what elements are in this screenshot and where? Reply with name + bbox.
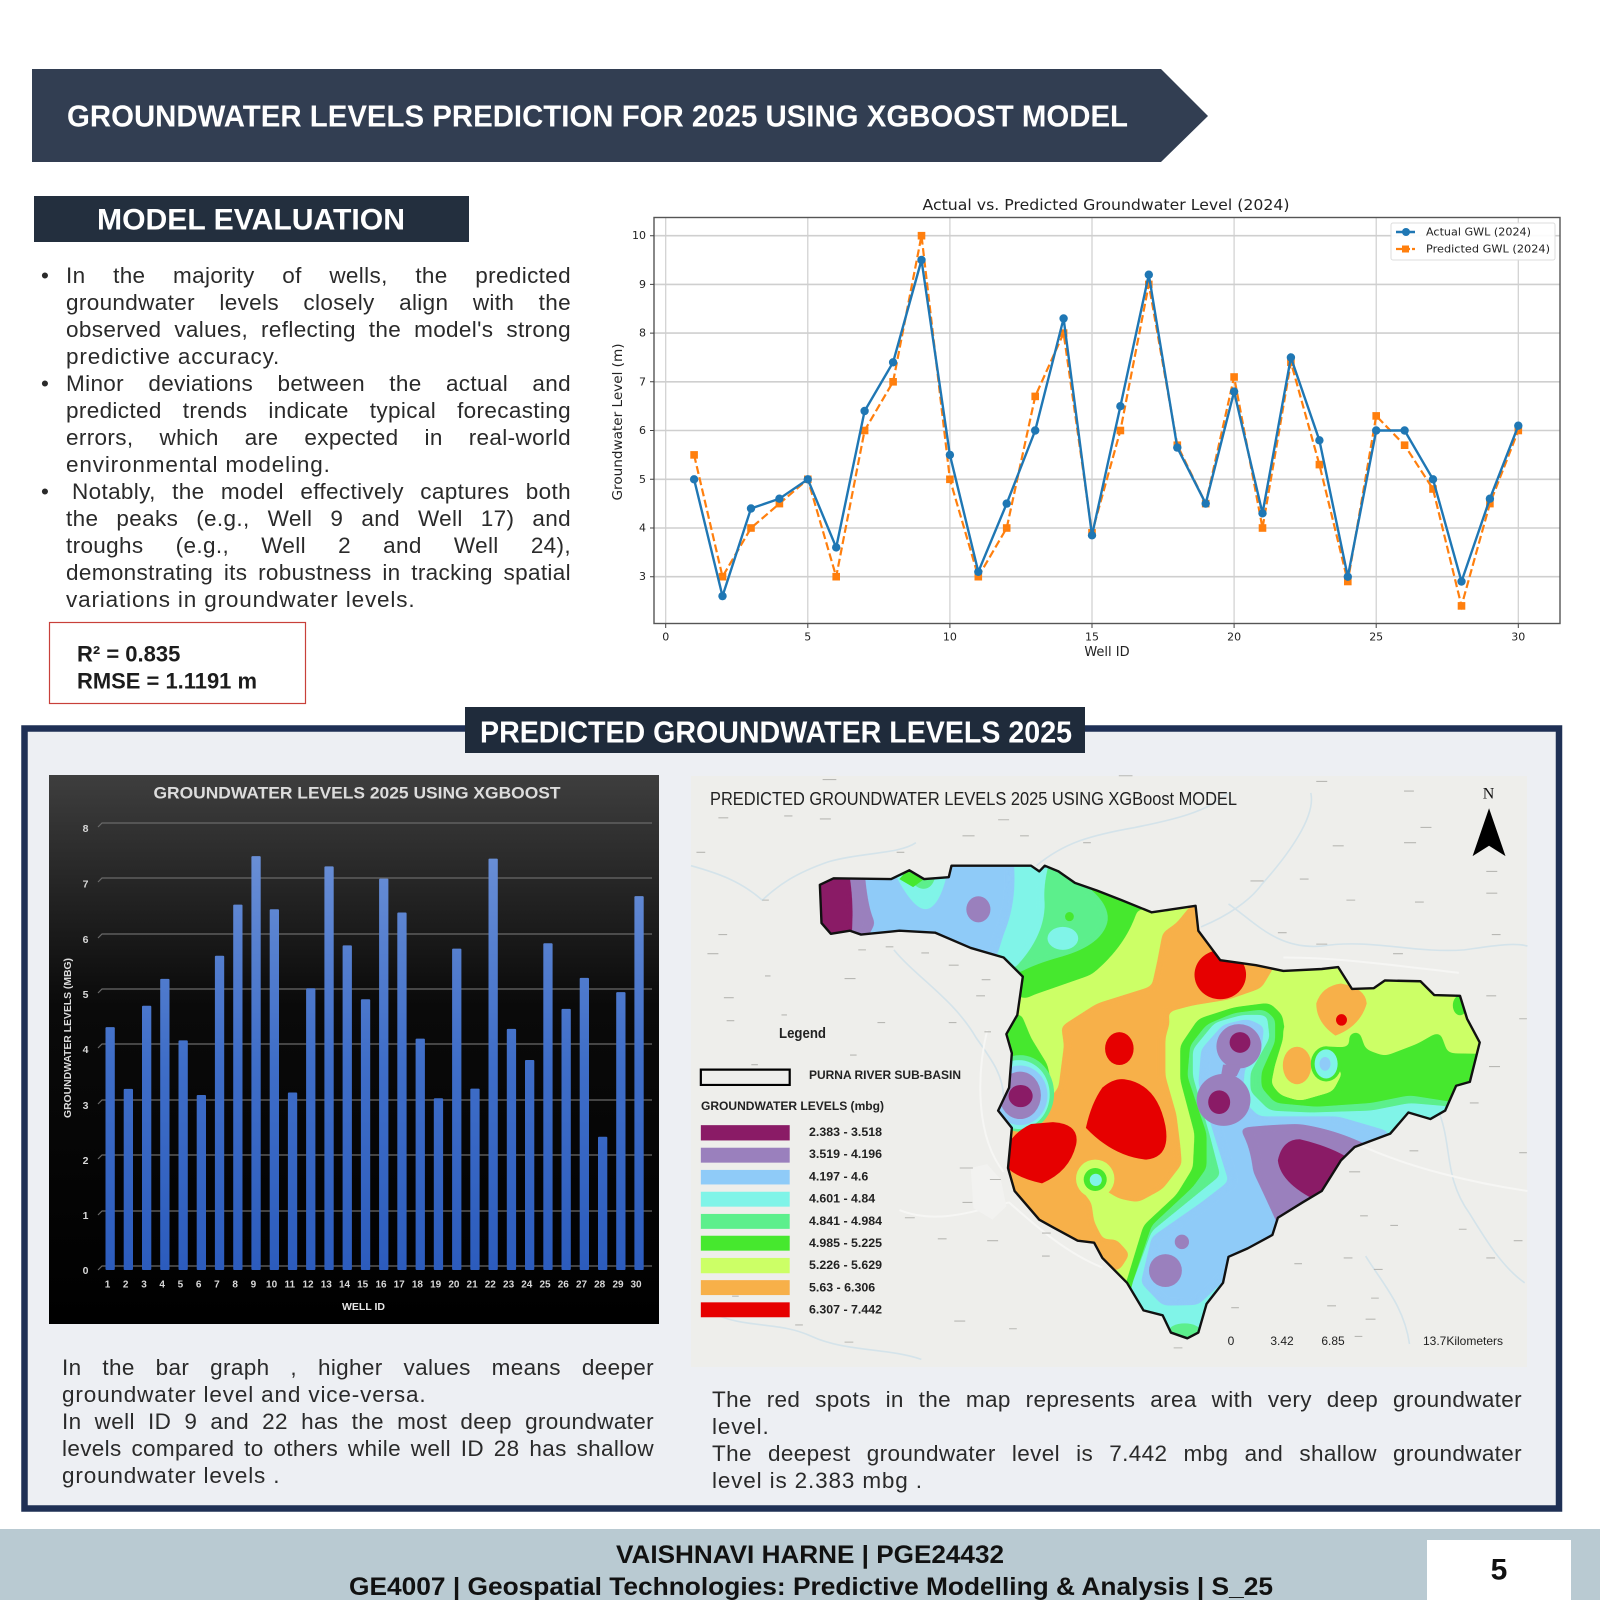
text block: model evaluation bullets: troughs (e.g., Well 2 and Well 24), [66, 533, 571, 558]
map: predicted groundwater levels 2025: 4.841 - 4.984 [809, 1214, 882, 1228]
bar chart: groundwater levels 2025: 6 [83, 934, 89, 946]
text block: model evaluation bullets: predicted trends indicate typical forecasting [66, 398, 571, 423]
page number: 5 [1491, 1554, 1507, 1586]
text block: model evaluation bullets: Notably, the model effectively captures both [72, 479, 571, 504]
line chart: actual vs predicted 2024: Actual vs. Predicted Groundwater Level (2024) [922, 196, 1290, 214]
legend swatches [701, 1070, 790, 1317]
bar chart: groundwater levels 2025: 22 [485, 1280, 496, 1290]
map: predicted groundwater levels 2025: N [1483, 786, 1495, 802]
line chart: actual vs predicted 2024: 15 [1085, 630, 1099, 644]
heading: predicted groundwater levels 2025: PREDICTED GROUNDWATER LEVELS 2025 [480, 714, 1072, 750]
map: predicted groundwater levels 2025: 2.383 - 3.518 [809, 1125, 882, 1139]
map: predicted groundwater levels 2025: 6.307 - 7.442 [809, 1303, 882, 1317]
bar chart: groundwater levels 2025: 28 [594, 1280, 606, 1290]
heading: model evaluation: MODEL EVALUATION [97, 204, 405, 236]
line chart: actual vs predicted 2024: 5 [639, 473, 646, 486]
map: predicted groundwater levels 2025: 5.226 - 5.629 [809, 1258, 882, 1272]
metrics callout [50, 622, 306, 704]
text block: bar graph note: In well ID 9 and 22 has the most deep groundwater [62, 1409, 654, 1434]
icon: north arrow [1473, 808, 1505, 856]
bar chart: groundwater levels 2025: GROUNDWATER LEVELS (MBG) [62, 958, 74, 1118]
line chart: actual vs predicted 2024: 8 [639, 327, 646, 340]
text block: map note: The red spots in the map represents area with very deep groundwater [712, 1387, 1522, 1412]
bar chart: groundwater levels 2025: 26 [558, 1280, 569, 1290]
map: predicted groundwater levels 2025: 6.85 [1321, 1334, 1345, 1348]
line chart: actual vs predicted 2024: 30 [1511, 630, 1525, 644]
bar chart: groundwater levels 2025: 27 [576, 1280, 587, 1290]
bar chart: groundwater levels 2025: 12 [302, 1280, 314, 1290]
line chart: actual vs predicted 2024: Well ID [1084, 645, 1130, 660]
line chart: actual vs predicted 2024: 9 [639, 278, 646, 291]
line chart: actual vs predicted 2024: 4 [639, 522, 646, 534]
text block: model evaluation bullets: • [41, 263, 49, 288]
text block: map note: level. [712, 1414, 770, 1439]
bar chart: groundwater levels 2025: 23 [503, 1280, 515, 1290]
bar chart: groundwater levels 2025: 3 [141, 1280, 147, 1290]
heading: model evaluation [34, 196, 469, 242]
line chart: actual vs predicted 2024: 20 [1227, 630, 1241, 644]
line chart: actual vs predicted 2024: 6 [639, 424, 646, 437]
bar chart: groundwater levels 2025: 29 [612, 1280, 624, 1290]
bar chart: groundwater levels 2025: 13 [321, 1280, 332, 1290]
central orange zone [1010, 907, 1272, 1270]
text block: map note: level is 2.383 mbg . [712, 1468, 923, 1493]
text block: bar graph note: groundwater levels . [62, 1463, 280, 1488]
text block: model evaluation bullets: demonstrating its robustness in tracking spatial [66, 560, 571, 585]
metrics callout: R² = 0.835 [77, 642, 180, 666]
line chart: actual vs predicted 2024: 10 [632, 229, 646, 242]
map: predicted groundwater levels 2025: 0 [1228, 1334, 1235, 1348]
bar chart: groundwater levels 2025: 0 [83, 1265, 89, 1277]
chart legend: Predicted GWL (2024) [1426, 242, 1550, 256]
text block: model evaluation bullets: • [41, 479, 49, 504]
map: predicted groundwater levels 2025: PREDICTED GROUNDWATER LEVELS 2025 USING XGBoost MODEL [710, 789, 1237, 809]
bar chart: groundwater levels 2025: 1 [105, 1280, 111, 1290]
text block: bar graph note [62, 1355, 654, 1488]
bar chart: groundwater levels 2025 [49, 775, 659, 1324]
map: predicted groundwater levels 2025: 4.601 - 4.84 [809, 1192, 875, 1206]
text block: map note: The deepest groundwater level is 7.442 mbg and shallow groundwater [712, 1441, 1522, 1466]
bar chart: groundwater levels 2025: 8 [83, 823, 89, 835]
chart legend: Actual GWL (2024) [1426, 226, 1531, 238]
metrics callout: RMSE = 1.1191 m [77, 668, 257, 694]
map: predicted groundwater levels 2025: Legend [779, 1026, 826, 1042]
east nested zones [1126, 1004, 1476, 1288]
line chart: actual vs predicted 2024: Groundwater Level (m) [611, 344, 626, 500]
map: predicted groundwater levels 2025: 3.42 [1270, 1334, 1294, 1348]
northwest zones [1020, 890, 1171, 998]
bar chart: groundwater levels 2025: 19 [430, 1280, 442, 1290]
bar chart: groundwater levels 2025: 8 [232, 1280, 238, 1290]
bar chart: groundwater levels 2025: 18 [412, 1280, 423, 1290]
bar chart: groundwater levels 2025: 5 [83, 989, 89, 1001]
map: predicted groundwater levels 2025 [691, 776, 1527, 1367]
text block: map note [712, 1387, 1522, 1493]
line chart: actual vs predicted 2024 [611, 196, 1560, 660]
basin outline [820, 866, 1480, 1338]
bar chart: groundwater levels 2025: 4 [159, 1280, 165, 1290]
text block: model evaluation bullets: observed values, reflecting the model's strong [66, 317, 571, 342]
line chart: actual vs predicted 2024: 0 [662, 630, 669, 644]
line chart: actual vs predicted 2024: 5 [804, 630, 811, 644]
text block: model evaluation bullets: predictive accuracy. [66, 344, 280, 369]
text block: model evaluation bullets: variations in groundwater levels. [66, 587, 415, 612]
title banner [32, 69, 1208, 162]
bar chart: groundwater levels 2025: 9 [251, 1280, 257, 1290]
text block: model evaluation bullets: groundwater levels closely align with the [66, 290, 571, 315]
bar chart: groundwater levels 2025: 16 [375, 1280, 387, 1290]
line chart: actual vs predicted 2024: 7 [639, 375, 646, 388]
bar chart: groundwater levels 2025: 7 [83, 878, 89, 890]
panel: predicted groundwater levels 2025 [24, 707, 1559, 1508]
chart legend [1391, 223, 1555, 260]
text block: model evaluation bullets: • [41, 371, 49, 396]
bar chart: groundwater levels 2025: 20 [448, 1280, 460, 1290]
map: predicted groundwater levels 2025: 4.197 - 4.6 [809, 1169, 868, 1183]
title banner: GROUNDWATER LEVELS PREDICTION FOR 2025 USING XGBOOST MODEL [67, 98, 1128, 134]
text block: model evaluation bullets: In the majority of wells, the predicted [66, 263, 571, 288]
map: predicted groundwater levels 2025: PURNA RIVER SUB-BASIN [809, 1068, 961, 1082]
map: predicted groundwater levels 2025: GROUNDWATER LEVELS (mbg) [701, 1099, 884, 1113]
bar chart: groundwater levels 2025: 6 [196, 1280, 202, 1290]
footer band: VAISHNAVI HARNE | PGE24432 [616, 1541, 1004, 1569]
bar chart: groundwater levels 2025: 5 [178, 1280, 184, 1290]
bar chart: groundwater levels 2025: 4 [83, 1044, 89, 1056]
text block: model evaluation bullets: the peaks (e.g., Well 9 and Well 17) and [66, 506, 571, 531]
map: predicted groundwater levels 2025: 4.985 - 5.225 [809, 1236, 882, 1250]
footer band [0, 1529, 1600, 1600]
map: predicted groundwater levels 2025: 3.519 - 4.196 [809, 1147, 882, 1161]
bar chart: groundwater levels 2025: 14 [339, 1280, 350, 1290]
line chart: actual vs predicted 2024: 10 [943, 630, 957, 644]
bar chart: groundwater levels 2025: 3 [83, 1100, 89, 1112]
bar chart: groundwater levels 2025: 10 [266, 1280, 278, 1290]
line chart: actual vs predicted 2024: 25 [1369, 630, 1383, 644]
bar chart: groundwater levels 2025: 15 [357, 1280, 369, 1290]
line chart: actual vs predicted 2024: 3 [639, 570, 646, 583]
west concentric low zone [1008, 1015, 1050, 1075]
bar chart: groundwater levels 2025: 30 [630, 1280, 642, 1290]
page number [1427, 1540, 1571, 1600]
bar chart: groundwater levels 2025: 1 [83, 1210, 89, 1222]
bar chart: groundwater levels 2025: 17 [394, 1280, 405, 1290]
map: predicted groundwater levels 2025: 5.63 - 6.306 [809, 1280, 875, 1294]
text block: bar graph note: In the bar graph , higher values means deeper [62, 1355, 654, 1380]
map: predicted groundwater levels 2025: 13.7Kilometers [1423, 1334, 1503, 1348]
text block: model evaluation bullets [41, 263, 571, 612]
bar chart: groundwater levels 2025: 21 [467, 1280, 478, 1290]
text block: bar graph note: groundwater level and vice-versa. [62, 1382, 426, 1407]
red deep zones [1194, 950, 1246, 999]
bar chart: groundwater levels 2025: 2 [123, 1280, 129, 1290]
bar chart: groundwater levels 2025: 24 [521, 1280, 533, 1290]
bar chart: groundwater levels 2025: 2 [83, 1155, 89, 1167]
bar chart: groundwater levels 2025: GROUNDWATER LEVELS 2025 USING XGBOOST [154, 784, 561, 802]
text block: model evaluation bullets: Minor deviations between the actual and [66, 371, 571, 396]
text block: model evaluation bullets: environmental modeling. [66, 452, 331, 477]
text block: bar graph note: levels compared to others while well ID 28 has shallow [62, 1436, 654, 1461]
bar chart: groundwater levels 2025: 25 [539, 1280, 551, 1290]
bar chart: groundwater levels 2025: WELL ID [342, 1301, 385, 1313]
text block: model evaluation bullets: errors, which are expected in real-world [66, 425, 571, 450]
bar chart: groundwater levels 2025: 11 [285, 1280, 296, 1290]
bar chart: groundwater levels 2025: 7 [214, 1280, 220, 1290]
